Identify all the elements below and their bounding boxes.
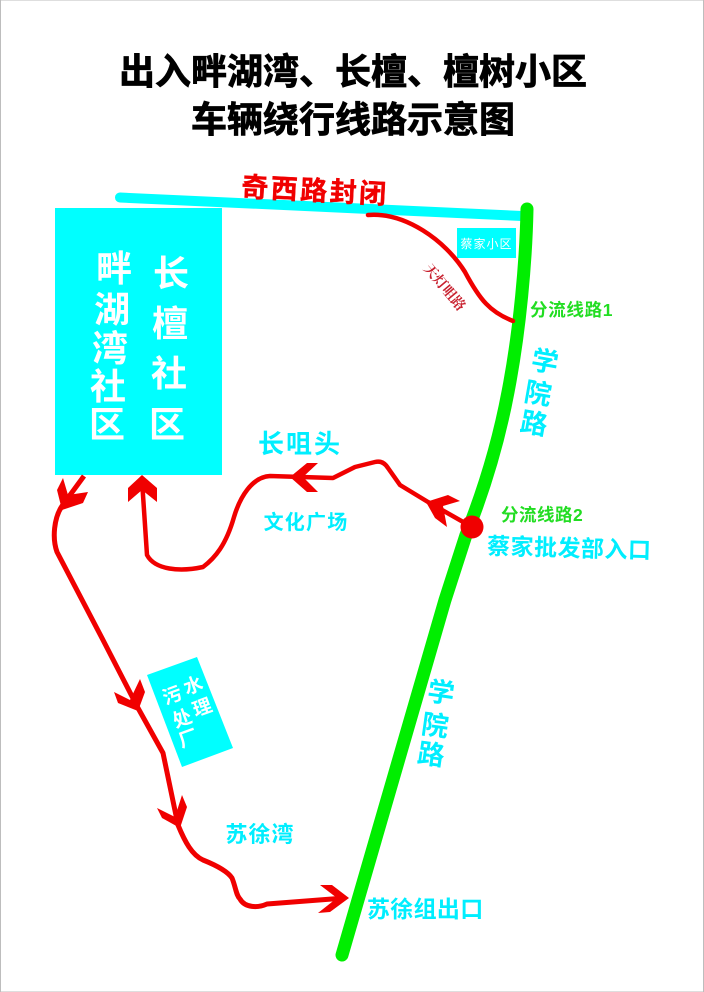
title [119,51,587,140]
panel: 污水处理厂: 水 [181,672,206,700]
label: 畔湖湾社区: 湖 [94,289,130,330]
label: 畔湖湾社区: 社 [90,366,126,407]
arrow [426,495,460,527]
road label upper: 学院路 [518,345,561,441]
label: 长檀社区: 区 [149,404,185,445]
title: 车辆绕行线路示意图 [191,99,515,140]
panel: 污水处理厂 [147,657,233,767]
road label upper: 学院路: 学 [529,345,561,379]
road closure line: 奇西路 [120,198,522,216]
panel: 污水处理厂: 污 [160,682,185,710]
label: 分流线路1: 分流线路1 [530,300,613,320]
arrow [290,463,318,492]
panel: 蔡家小区: 蔡家小区 [460,236,513,251]
exit route [54,476,349,913]
label: 苏徐湾: 苏徐湾 [225,822,295,847]
label: 长檀社区 [149,253,189,445]
panel: 污水处理厂: 理 [190,695,215,722]
label: 畔湖湾社区 [89,248,132,445]
arrow [114,679,145,711]
main road: 学院路 [342,209,527,955]
label: 分流线路2: 分流线路2 [501,505,583,525]
road label lower: 学院路: 路 [416,738,446,772]
road label upper: 学院路: 路 [518,407,550,441]
road name: 天灯咀路: 天灯咀路 [419,259,471,315]
label: 苏徐组出口: 苏徐组出口 [367,896,484,922]
panel: 蔡家小区 [457,228,516,258]
marker: diversion point 2 [460,516,484,538]
diversion route 2 [128,462,472,569]
label: 畔湖湾社区: 湾 [92,328,128,369]
label: 长檀社区: 长 [153,253,189,294]
label: 长咀头: 长咀头 [258,429,342,459]
road label lower: 学院路: 院 [420,709,450,743]
road label upper: 学院路: 院 [522,377,554,411]
label: 文化广场: 文化广场 [264,510,348,534]
panel: 污水处理厂: 厂 [176,726,201,753]
arrow [318,885,349,913]
arrow [57,478,88,510]
label: 蔡家批发部入口: 蔡家批发部入口 [487,533,652,563]
label: 长檀社区: 社 [151,353,187,394]
label: 畔湖湾社区: 区 [89,404,125,445]
panel: 污水处理厂: 处 [170,705,195,733]
arrow [128,475,157,502]
road label lower: 学院路 [416,676,456,772]
road label lower: 学院路: 学 [426,676,456,710]
panel: community block [55,208,222,475]
label: 长檀社区: 檀 [152,303,188,344]
arrow [157,795,187,828]
label: 畔湖湾社区: 畔 [96,248,132,289]
title: 出入畔湖湾、长檀、檀树小区 [119,51,587,92]
road closure label: 奇西路封闭 [241,172,389,210]
diversion route 1 [368,215,513,321]
